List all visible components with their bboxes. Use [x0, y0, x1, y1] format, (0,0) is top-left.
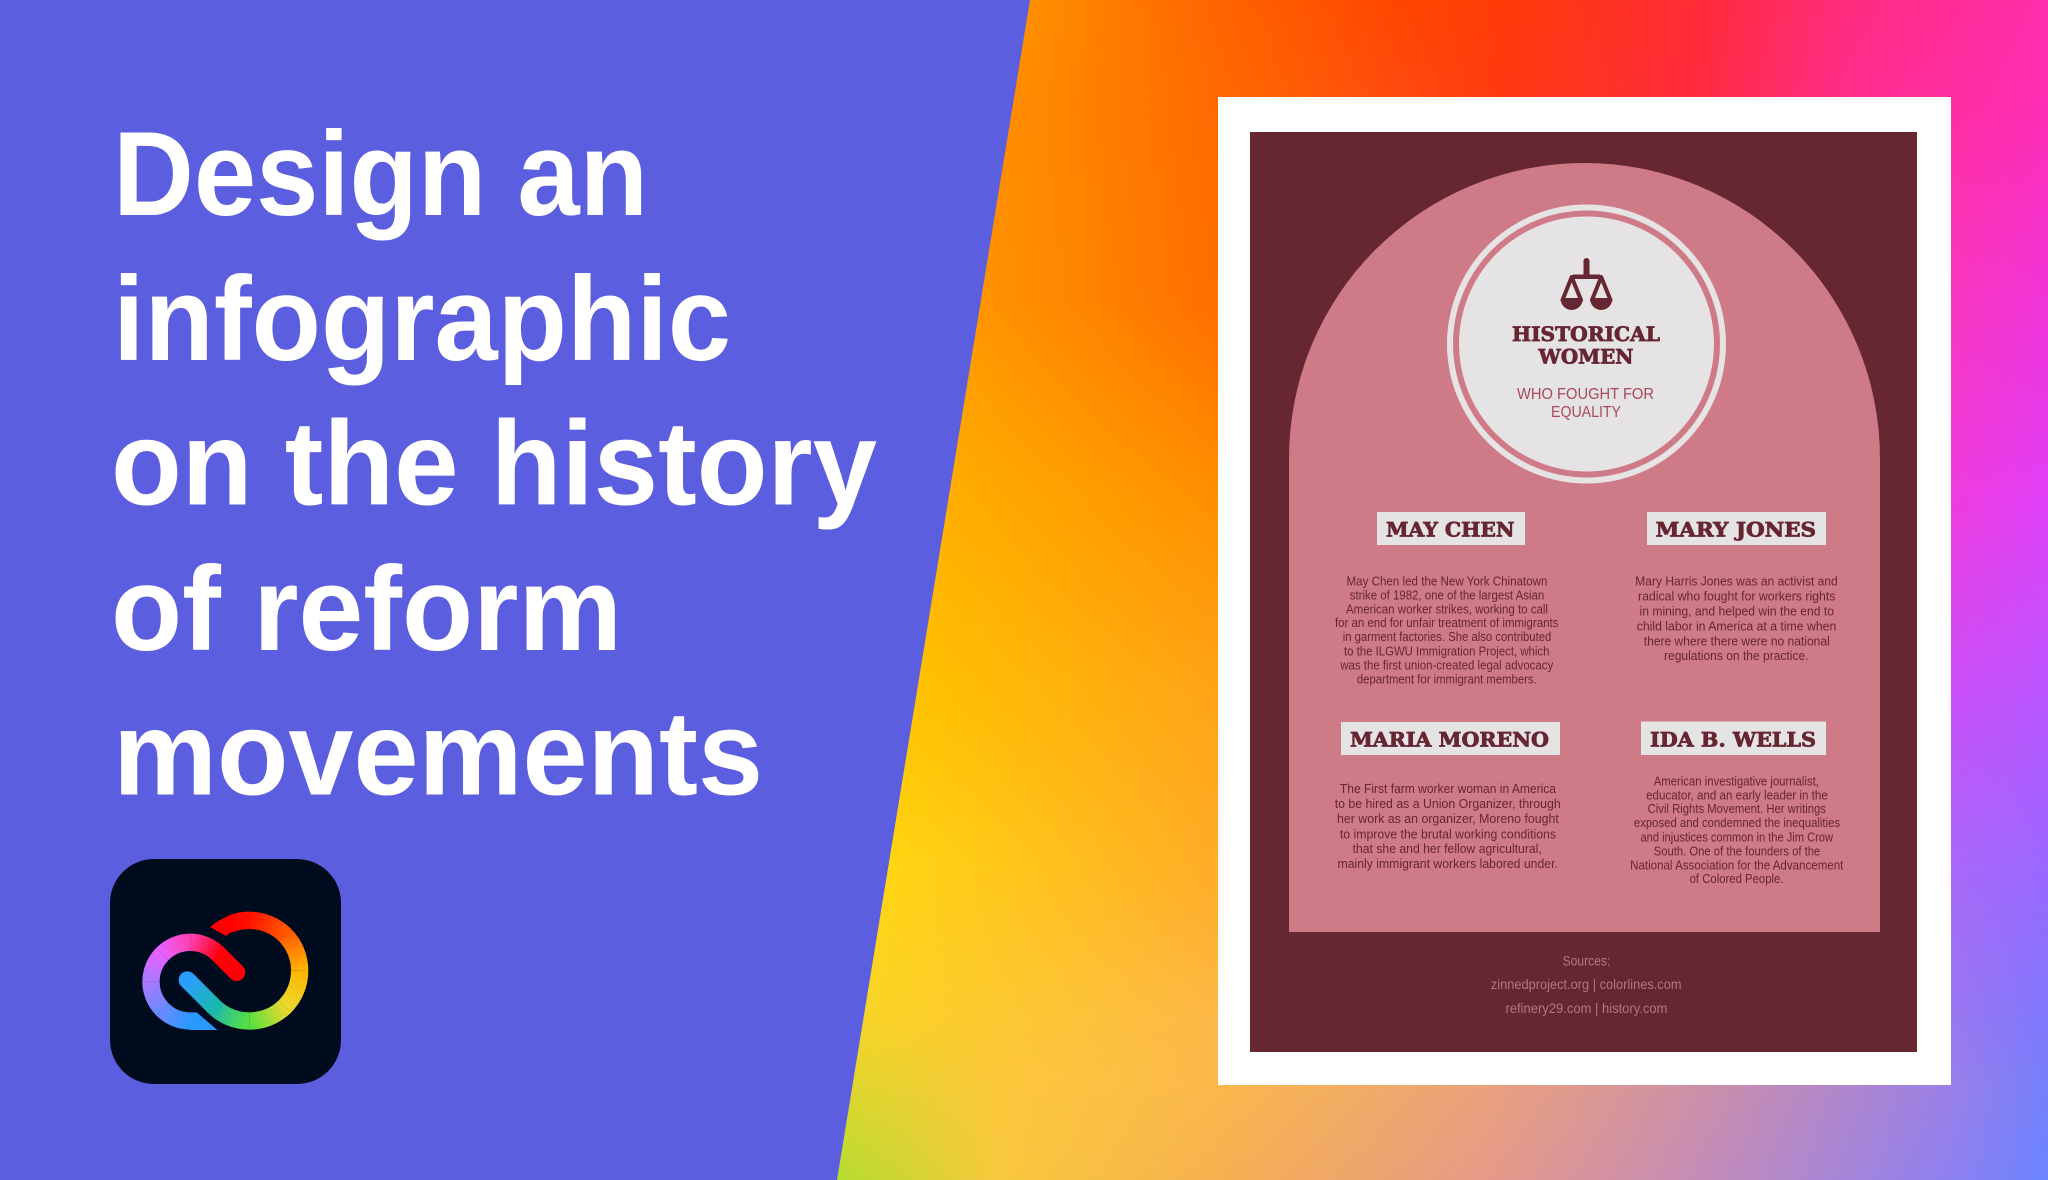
bio: Ida B. Wells: educator, and an early leader in the: [1646, 788, 1828, 802]
title: of reform: [111, 542, 622, 676]
bio: May Chen: strike of 1982, one of the largest Asian: [1350, 589, 1544, 603]
sources: refinery29.com | history.com: [1506, 1001, 1667, 1016]
poster: [1250, 132, 1917, 1052]
title: movements: [113, 686, 763, 820]
bio: Maria Moreno: [1335, 782, 1561, 871]
bio: Mary Jones: Mary Harris Jones was an activist and: [1635, 574, 1838, 588]
icon: balance scale: [1561, 258, 1612, 310]
bio: Ida B. Wells: exposed and condemned the inequalities: [1634, 816, 1840, 830]
title: [111, 107, 877, 820]
title: infographic: [113, 252, 731, 386]
poster subtitle: WHO FOUGHT FOR: [1517, 386, 1654, 403]
bio: Mary Jones: regulations on the practice.: [1664, 649, 1808, 663]
name label: Mary Jones: MARY JONES: [1656, 518, 1816, 542]
bio: Mary Jones: in mining, and helped win the end to: [1640, 604, 1834, 618]
bio: May Chen: May Chen led the New York Chinatown: [1346, 574, 1548, 588]
bio: May Chen: in garment factories. She also contributed: [1343, 630, 1551, 644]
card: Mary Jones: [1635, 512, 1838, 663]
bio: May Chen: American worker strikes, working to call: [1346, 602, 1548, 616]
background: rainbow gradient mesh: [837, 0, 2048, 1180]
name label: Mary Jones: [1647, 512, 1826, 545]
white poster frame: [1218, 97, 1951, 1085]
poster title: HISTORICAL: [1512, 323, 1660, 346]
bio: May Chen: department for immigrant members.: [1357, 672, 1537, 686]
bio: Mary Jones: radical who fought for workers rights: [1638, 589, 1835, 603]
bio: Ida B. Wells: [1630, 775, 1844, 886]
poster dark background: [1250, 132, 1917, 1052]
bio: Maria Moreno: mainly immigrant workers labored under.: [1338, 857, 1558, 871]
icon: app logo: [110, 859, 341, 1084]
name label: Ida B. Wells: [1641, 722, 1826, 755]
poster subtitle: [1517, 386, 1654, 421]
sources: Sources:: [1563, 954, 1610, 969]
poster title: WOMEN: [1537, 346, 1634, 368]
bio: Mary Jones: child labor in America at a time when: [1637, 619, 1836, 633]
header badge: [1447, 204, 1726, 484]
bio: Ida B. Wells: and injustices common in the Jim Crow: [1640, 831, 1834, 845]
pink arch panel: [1289, 163, 1880, 932]
left purple wedge panel: [0, 0, 1030, 1180]
bio: May Chen: to the ILGWU Immigration Project, which: [1344, 645, 1549, 659]
card: May Chen: [1335, 512, 1558, 686]
bio: Ida B. Wells: of Colored People.: [1690, 872, 1784, 886]
sources: zinnedproject.org | colorlines.com: [1491, 977, 1682, 992]
bio: Maria Moreno: to be hired as a Union Organizer, through: [1335, 797, 1561, 811]
bio: May Chen: was the first union-created legal advocacy: [1339, 658, 1554, 672]
title: Design an: [113, 107, 648, 241]
bio: Maria Moreno: to improve the brutal working conditions: [1340, 827, 1556, 841]
name label: Maria Moreno: [1341, 722, 1560, 755]
bio: Ida B. Wells: National Association for the Advancement: [1630, 858, 1844, 872]
bio: Mary Jones: [1635, 574, 1838, 663]
card: Ida B. Wells: [1630, 722, 1844, 886]
bio: May Chen: for an end for unfair treatment of immigrants: [1335, 616, 1558, 630]
name label: May Chen: MAY CHEN: [1386, 518, 1515, 542]
bio: Ida B. Wells: South. One of the founders of the: [1654, 844, 1820, 858]
title: on the history: [111, 396, 877, 530]
sources: [1491, 954, 1682, 1016]
bio: Ida B. Wells: Civil Rights Movement. Her writings: [1648, 802, 1826, 816]
bio: Mary Jones: there where there were no national: [1644, 634, 1830, 648]
bio: Maria Moreno: her work as an organizer, Moreno fought: [1337, 812, 1559, 826]
name label: Maria Moreno: MARIA MORENO: [1350, 728, 1549, 752]
card: Maria Moreno: [1335, 722, 1561, 871]
poster subtitle: EQUALITY: [1551, 404, 1621, 421]
poster title: [1512, 323, 1660, 368]
bio: May Chen: [1335, 574, 1558, 686]
name label: May Chen: [1377, 512, 1525, 545]
bio: Maria Moreno: The First farm worker woman in America: [1340, 782, 1556, 796]
name label: Ida B. Wells: IDA B. WELLS: [1650, 728, 1816, 752]
bio: Maria Moreno: that she and her fellow agricultural,: [1353, 842, 1542, 856]
bio: Ida B. Wells: American investigative journalist,: [1654, 775, 1819, 789]
